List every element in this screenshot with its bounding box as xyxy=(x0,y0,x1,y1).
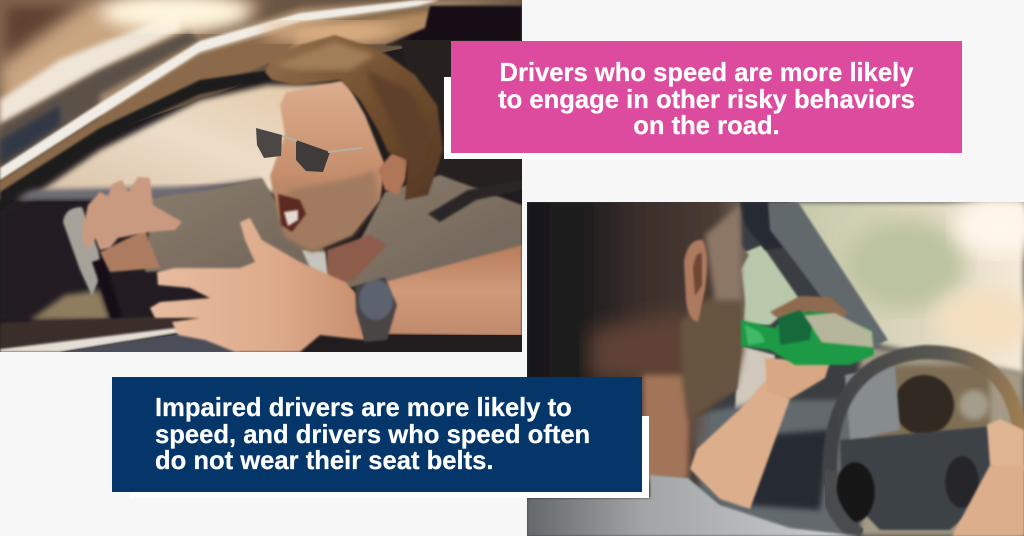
steering wheel rim xyxy=(830,352,1020,485)
background behind driver xyxy=(400,40,522,190)
skin on head and neck xyxy=(590,310,700,480)
photo: driver drinking from a green bottle at the wheel xyxy=(527,202,1024,536)
pink callout text: on the road. xyxy=(633,112,780,140)
white offset strip behind pink box xyxy=(444,77,950,159)
torso shirt xyxy=(320,175,522,290)
door and interior xyxy=(690,400,860,536)
sunglasses xyxy=(256,128,362,172)
car roof and pillar bands xyxy=(0,0,522,208)
head xyxy=(527,202,749,500)
door sill xyxy=(0,317,205,348)
callout: navy impaired drivers message xyxy=(112,377,642,492)
face xyxy=(270,80,385,252)
dashboard xyxy=(860,345,1024,536)
ear xyxy=(378,153,408,195)
steering wheel hub and spokes xyxy=(835,365,1005,530)
navy callout text: speed, and drivers who speed often xyxy=(155,421,590,449)
lower hand xyxy=(765,358,830,399)
forearm xyxy=(690,379,790,509)
pink callout text: Drivers who speed are more likely xyxy=(500,59,913,87)
dark car interior xyxy=(0,180,270,320)
beard stubble xyxy=(680,290,744,420)
upper fingers xyxy=(770,296,847,322)
ear xyxy=(684,240,707,322)
pink callout text xyxy=(498,59,915,140)
raised left hand xyxy=(82,177,182,250)
side window glimpses xyxy=(738,245,800,325)
hair xyxy=(265,35,443,200)
shirt sleeve xyxy=(145,178,330,280)
wristwatch xyxy=(355,277,397,342)
photo: angry driver leaning out of car window xyxy=(0,0,522,352)
left forearm xyxy=(100,230,160,272)
neck and collar xyxy=(327,235,387,281)
roof pillar xyxy=(738,202,800,250)
green bottle xyxy=(741,310,874,365)
right hand on wheel xyxy=(987,419,1024,480)
front hand xyxy=(150,218,365,352)
steering wheel xyxy=(63,207,102,296)
navy callout text xyxy=(155,394,590,475)
shirt xyxy=(527,475,860,536)
pink callout text: to engage in other risky behaviors xyxy=(498,86,915,114)
white offset strip behind navy box xyxy=(130,416,649,498)
callout: pink speeding message xyxy=(451,41,962,153)
window background xyxy=(20,85,330,205)
mouth xyxy=(278,194,306,232)
windshield xyxy=(790,202,1024,375)
gauges xyxy=(894,375,954,435)
navy callout text: do not wear their seat belts. xyxy=(155,447,493,475)
navy callout text: Impaired drivers are more likely to xyxy=(155,394,572,422)
right forearm xyxy=(385,245,522,336)
